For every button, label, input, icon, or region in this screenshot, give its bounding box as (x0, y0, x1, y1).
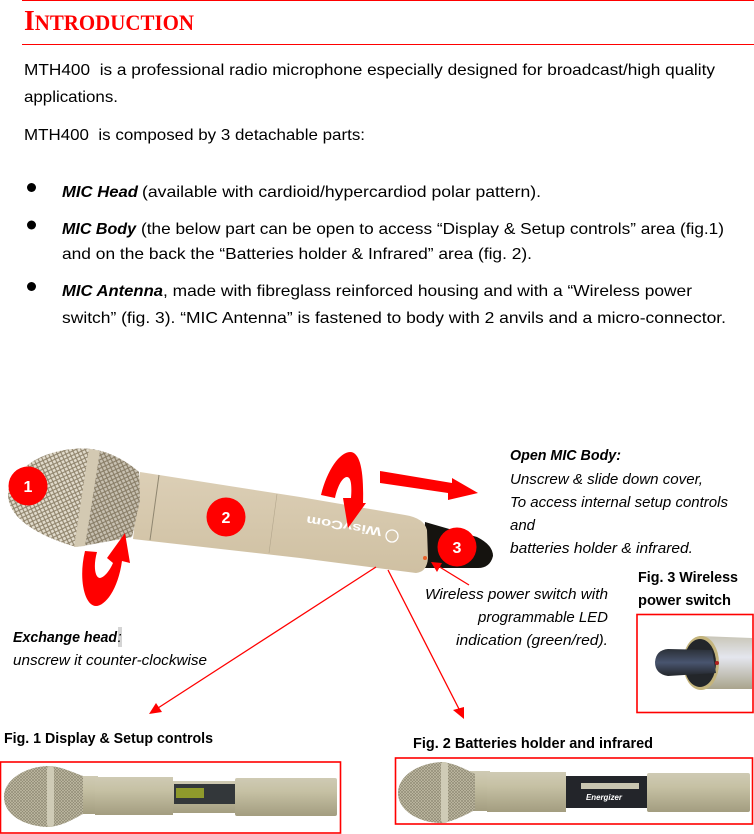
bullet: MIC Body: (the below part can be open to access “Display & Setup controls” area (fig.1) (141, 221, 724, 238)
text block: open MIC body: To access internal setup controls (510, 494, 728, 511)
arrow: to power switch (431, 562, 469, 585)
bullet: MIC Body: and on the back the “Batteries holder & Infrared” area (fig. 2). (62, 246, 532, 263)
marker 2 (206, 498, 246, 536)
bullet: MIC Antenna (27, 282, 726, 327)
text block: wireless power switch: Wireless power switch with (425, 586, 608, 603)
marker 1 (8, 466, 48, 506)
caption: fig 3: power switch (638, 592, 731, 609)
text block: exchange head (13, 627, 207, 669)
text block: wireless power switch: programmable LED (477, 609, 608, 626)
text block: open MIC body: Unscrew & slide down cover, (510, 471, 703, 488)
text block: open MIC body: Open MIC Body: (510, 447, 621, 464)
caption: fig 3: Fig. 3 Wireless (638, 569, 738, 586)
brand logo: WisyCom (305, 513, 382, 539)
figure 1: display and setup photo (0, 762, 340, 833)
bullet: MIC Body (27, 220, 724, 263)
mic body (133, 472, 428, 573)
heading: Introduction: INTRODUCTION (24, 5, 194, 37)
text block: open MIC body (510, 447, 728, 557)
text block: exchange head: unscrew it counter-clockwise (13, 652, 207, 669)
arrow: to fig 2 (388, 570, 464, 719)
figure 2: batteries holder photo: Energizer (586, 793, 623, 802)
marker 3 (438, 528, 476, 566)
caption: fig 3 (638, 569, 738, 609)
text block: intro paragraph: MTH400 is a professional radio microphone especially designed for broadcast/high quality (24, 62, 715, 79)
bullet: MIC Head: MIC Head (62, 184, 138, 201)
bullet: MIC Head (27, 183, 541, 201)
microphone photo (8, 449, 493, 573)
arrow: rotate head (82, 533, 130, 606)
marker 2: 2 (222, 510, 231, 527)
marker 1: 1 (24, 479, 33, 496)
text block: wireless power switch: indication (green/red). (456, 632, 608, 649)
figure 2: batteries holder photo (396, 758, 752, 824)
arrow: to fig 1 (149, 567, 376, 714)
antenna (423, 522, 493, 568)
bullet: MIC Antenna: MIC Antenna (62, 283, 163, 300)
head collar (74, 449, 100, 547)
text block: wireless power switch (425, 586, 608, 649)
bullet: MIC Body: MIC Body (62, 221, 137, 238)
text block: intro paragraph: applications. (24, 89, 118, 106)
bullet: MIC Antenna: , made with fibreglass reinforced housing and with a “Wireless power (163, 283, 692, 300)
head grille (8, 449, 140, 547)
text block: intro paragraph: MTH400 is composed by 3 detachable parts: (24, 127, 365, 144)
caption: fig 2: Fig. 2 Batteries holder and infrared (413, 735, 653, 752)
bullet: MIC Head: (available with cardioid/hypercardiod polar pattern). (142, 184, 541, 201)
arrow: slide cover (380, 471, 478, 500)
figure 3: power switch photo (637, 614, 753, 712)
caption: fig 1: Fig. 1 Display & Setup controls (4, 730, 213, 747)
text block: intro paragraph (24, 62, 715, 144)
text block: open MIC body: and (510, 517, 536, 534)
text block: exchange head: : (118, 629, 122, 646)
text block: exchange head: Exchange head (13, 629, 118, 646)
bullet: MIC Antenna: switch” (fig. 3). “MIC Antenna” is fastened to body with 2 anvils and a micro-connector. (62, 310, 726, 327)
arrow: rotate body (321, 452, 366, 528)
marker 3: 3 (453, 540, 462, 557)
text block: open MIC body: batteries holder & infrared. (510, 540, 693, 557)
